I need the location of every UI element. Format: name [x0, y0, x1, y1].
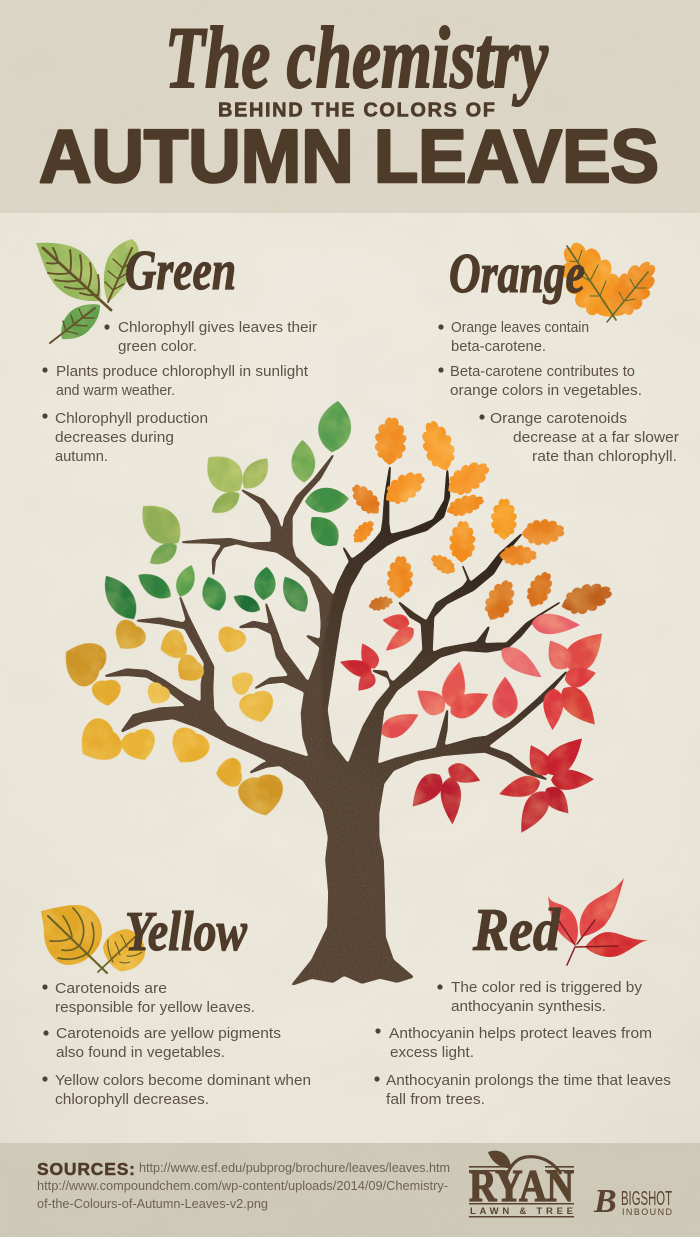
bullet list: orange: beta-carotene.	[451, 339, 546, 355]
bullet list: red: Anthocyanin helps protect leaves from	[389, 1026, 652, 1042]
heading: yellow: Yellow	[125, 901, 248, 963]
bullet list: red: Anthocyanin prolongs the time that leaves	[386, 1073, 671, 1089]
bullet list: green: and warm weather.	[56, 383, 175, 399]
orange leaves on tree	[346, 417, 615, 625]
bigshot mark: B	[593, 1183, 617, 1220]
icon: green leaves	[36, 239, 139, 343]
tree	[55, 399, 615, 985]
bullet list: green: decreases during	[55, 430, 174, 446]
logo wordmark: RYAN	[469, 1160, 574, 1211]
bigshot tagline: INBOUND	[622, 1207, 672, 1217]
title line: behind the colors of: BEHIND THE COLORS OF	[218, 100, 495, 122]
bullet list: red: excess light.	[390, 1045, 474, 1061]
bullet list: orange: Orange carotenoids	[490, 411, 627, 427]
header band	[0, 0, 700, 213]
icon: red leaves	[548, 878, 648, 965]
sources	[37, 1159, 450, 1211]
logo: Bigshot Inbound	[593, 1183, 672, 1220]
red leaves on tree	[338, 612, 612, 838]
sources heading: SOURCES:	[37, 1159, 135, 1179]
heading: green: Green	[125, 240, 236, 302]
source links: http://www.esf.edu/pubprog/brochure/leaves/leaves.htm	[139, 1161, 450, 1175]
bullet list: green: autumn.	[55, 449, 108, 465]
bullet list: yellow: responsible for yellow leaves.	[55, 1000, 255, 1016]
bullet list: yellow: Carotenoids are yellow pigments	[56, 1026, 281, 1042]
bullet list: orange: Orange leaves contain	[451, 320, 589, 336]
bullet list: yellow	[42, 981, 311, 1108]
bullet list: green: green color.	[118, 339, 197, 355]
bullet list: yellow: Yellow colors become dominant when	[55, 1073, 311, 1089]
bullet list: green: Plants produce chlorophyll in sunlight	[56, 364, 308, 380]
bullet list: orange: Beta-carotene contributes to	[450, 364, 635, 380]
bullet list: red: fall from trees.	[386, 1092, 485, 1108]
panel: green	[36, 239, 317, 465]
green leaves on tree	[96, 399, 354, 626]
bullet list: orange: orange colors in vegetables.	[450, 383, 642, 399]
source links	[37, 1161, 450, 1211]
panel: orange	[438, 232, 679, 465]
bullet list: green: Chlorophyll gives leaves their	[118, 320, 317, 336]
bullet list: orange: decrease at a far slower	[513, 430, 679, 446]
heading: orange: Orange	[449, 243, 585, 305]
title	[39, 10, 659, 198]
footer band	[0, 1143, 700, 1237]
yellow leaves on tree	[55, 616, 288, 820]
bullet list: yellow: also found in vegetables.	[56, 1045, 225, 1061]
tree trunk and branches	[105, 455, 567, 985]
heading: red: Red	[472, 897, 561, 963]
bullet list: orange: rate than chlorophyll.	[532, 449, 677, 465]
logo tagline: LAWN & TREE	[470, 1206, 573, 1217]
source links: of-the-Colours-of-Autumn-Leaves-v2.png	[37, 1197, 268, 1211]
bullet list: yellow: Carotenoids are	[55, 981, 167, 997]
bullet list: orange	[438, 320, 679, 465]
bullet list: green	[42, 320, 317, 465]
panel: red	[374, 878, 671, 1108]
bullet list: yellow: chlorophyll decreases.	[55, 1092, 209, 1108]
source links: http://www.compoundchem.com/wp-content/uploads/2014/09/Chemistry-	[37, 1179, 448, 1193]
icon: yellow leaves	[41, 905, 145, 973]
bullet list: red: anthocyanin synthesis.	[451, 999, 606, 1015]
bullet list: red: The color red is triggered by	[451, 980, 643, 996]
icon: orange oak leaves	[548, 232, 665, 330]
bullet list: red	[374, 980, 671, 1108]
logo leaf	[488, 1151, 511, 1168]
title line: autumn leaves: AUTUMN LEAVES	[39, 114, 659, 198]
title line: The chemistry: The chemistry	[165, 10, 549, 107]
logo: Ryan Lawn & Tree	[469, 1151, 574, 1218]
bullet list: green: Chlorophyll production	[55, 411, 208, 427]
panel: yellow	[41, 901, 311, 1108]
